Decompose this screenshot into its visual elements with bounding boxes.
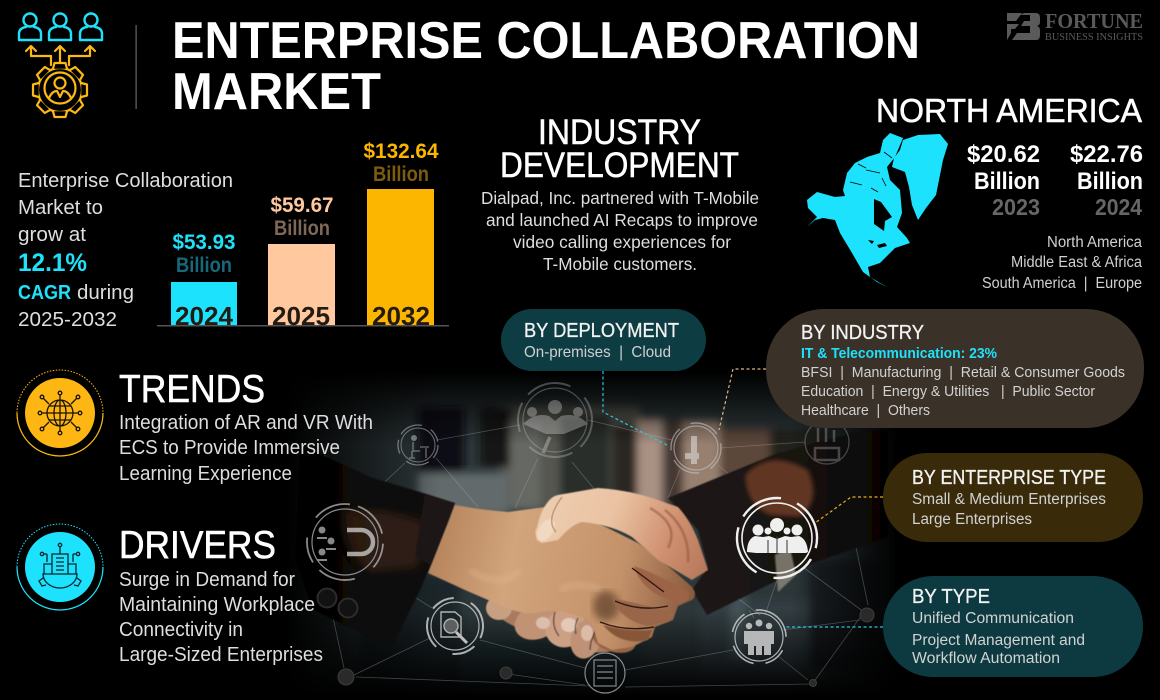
bar chart: Billion [373,163,429,186]
regions list: South America | Europe [982,275,1142,292]
CAGR text block: Enterprise Collaboration [18,170,233,192]
panel: by type: Workflow Automation [912,650,1060,667]
network icon circles [296,383,874,693]
title: ENTERPRISE COLLABORATION [172,12,920,70]
panel: by industry: Education | Energy & Utilities | Public Sector [801,383,1095,400]
icon: team [722,600,796,674]
bar chart: 2032 [372,301,430,331]
icon: business group bright [722,483,832,593]
drivers heading: DRIVERS [119,524,276,567]
panel: by type: Unified Communication [912,610,1074,627]
bar chart: 2024 [175,301,234,331]
handshake hands [428,488,708,663]
header divider [136,25,137,109]
industry development: and launched AI Recaps to improve [486,210,758,230]
panel: by enterprise type: Small & Medium Enterprises [912,491,1106,508]
panel: by industry: IT & Telecommunication: 23% [801,346,997,362]
panel: by enterprise type: BY ENTERPRISE TYPE [912,467,1106,489]
CAGR text block: grow at [18,224,86,246]
trends heading: TRENDS [119,368,265,411]
CAGR text block: during [77,282,134,304]
left hand [428,505,695,650]
connector: type [783,626,883,628]
panel: by deployment: On-premises | Cloud [524,344,671,361]
drivers text: Surge in Demand for [119,568,295,591]
icon: hub figure [671,423,721,473]
icon: collaboration gear and people [19,14,102,117]
infinity rings [318,588,358,618]
connector: enterprise type [815,497,883,523]
panel: by type [883,576,1143,677]
logo: Fortune Business Insights: BUSINESS INSIGHTS [1045,32,1143,43]
drivers text: Large-Sized Enterprises [119,643,323,666]
industry development: INDUSTRY [538,113,701,152]
bar chart: Billion [274,217,330,240]
regions list [982,234,1142,292]
regional values: 2023 [992,194,1040,220]
panel: by industry: BFSI | Manufacturing | Retail & Consumer Goods [801,364,1125,381]
CAGR text block: 12.1% [18,249,87,277]
CAGR text block: CAGR [18,282,71,304]
panel: by type: BY TYPE [912,586,990,608]
knuckle shading [470,566,689,641]
icon: trends globe badge [17,370,103,456]
bar chart: $132.64 [364,140,439,163]
regional values: Billion [974,168,1040,195]
CAGR text block: 2025-2032 [18,309,117,331]
trends text [119,411,373,485]
trends text: Learning Experience [119,462,292,485]
icon: desk worker [398,425,438,465]
regions list: North America [1047,234,1142,251]
right sleeve [668,430,888,615]
right hand [536,488,708,580]
title [172,12,920,121]
map: North America [807,133,948,287]
panel: by enterprise type [883,453,1143,542]
bar chart: 2025 [272,301,330,331]
left sleeve [295,445,455,647]
icon: org chart [805,420,849,464]
regional values: $20.62 [967,141,1040,168]
bar chart: $59.67 [270,194,334,217]
title: MARKET [172,63,381,121]
trends text: Integration of AR and VR With [119,411,373,434]
CAGR text block: Market to [18,197,103,219]
icon: checklist [585,653,625,693]
drivers text: Maintaining Workplace [119,593,315,616]
network lines [325,420,868,687]
CAGR text block [18,170,233,331]
industry development: Dialpad, Inc. partnered with T-Mobile [481,188,759,208]
industry development: T-Mobile customers. [543,254,697,274]
handshake photo background [270,360,905,700]
lower fingers [486,596,640,663]
panel: by industry: BY INDUSTRY [801,322,924,344]
small network nodes [338,608,874,686]
logo: Fortune Business Insights: FORTUNE [1045,9,1143,33]
icon: people search [518,383,592,457]
bar chart: $53.93 [172,231,236,254]
panel: by type: Project Management and [912,632,1085,649]
logo: Fortune Business Insights [1007,9,1143,43]
bar chart [157,140,449,331]
regional values: $22.76 [1070,141,1143,168]
regional values: 2024 [1095,194,1142,220]
panel: by industry [766,309,1144,428]
bar chart: Billion [176,254,232,277]
panel: by deployment [501,309,706,371]
connector: deployment [603,371,669,446]
icon: drivers smart factory badge [17,524,103,610]
panel: by enterprise type: Large Enterprises [912,511,1032,528]
icon: document search [416,587,494,665]
regional values [967,141,1143,220]
panel: by industry: Healthcare | Others [801,402,930,419]
industry development: DEVELOPMENT [500,146,739,185]
icon: magnet and people [296,493,394,591]
regional values: Billion [1077,168,1143,195]
north america heading: NORTH AMERICA [876,92,1142,129]
trends text: ECS to Provide Immersive [119,436,340,459]
panel: by deployment: BY DEPLOYMENT [524,320,679,342]
drivers text: Connectivity in [119,618,243,641]
industry development [481,113,759,274]
industry development: video calling experiences for [513,232,731,252]
connector: industry [719,369,766,430]
regions list: Middle East & Africa [1011,254,1142,271]
drivers text [119,568,323,666]
